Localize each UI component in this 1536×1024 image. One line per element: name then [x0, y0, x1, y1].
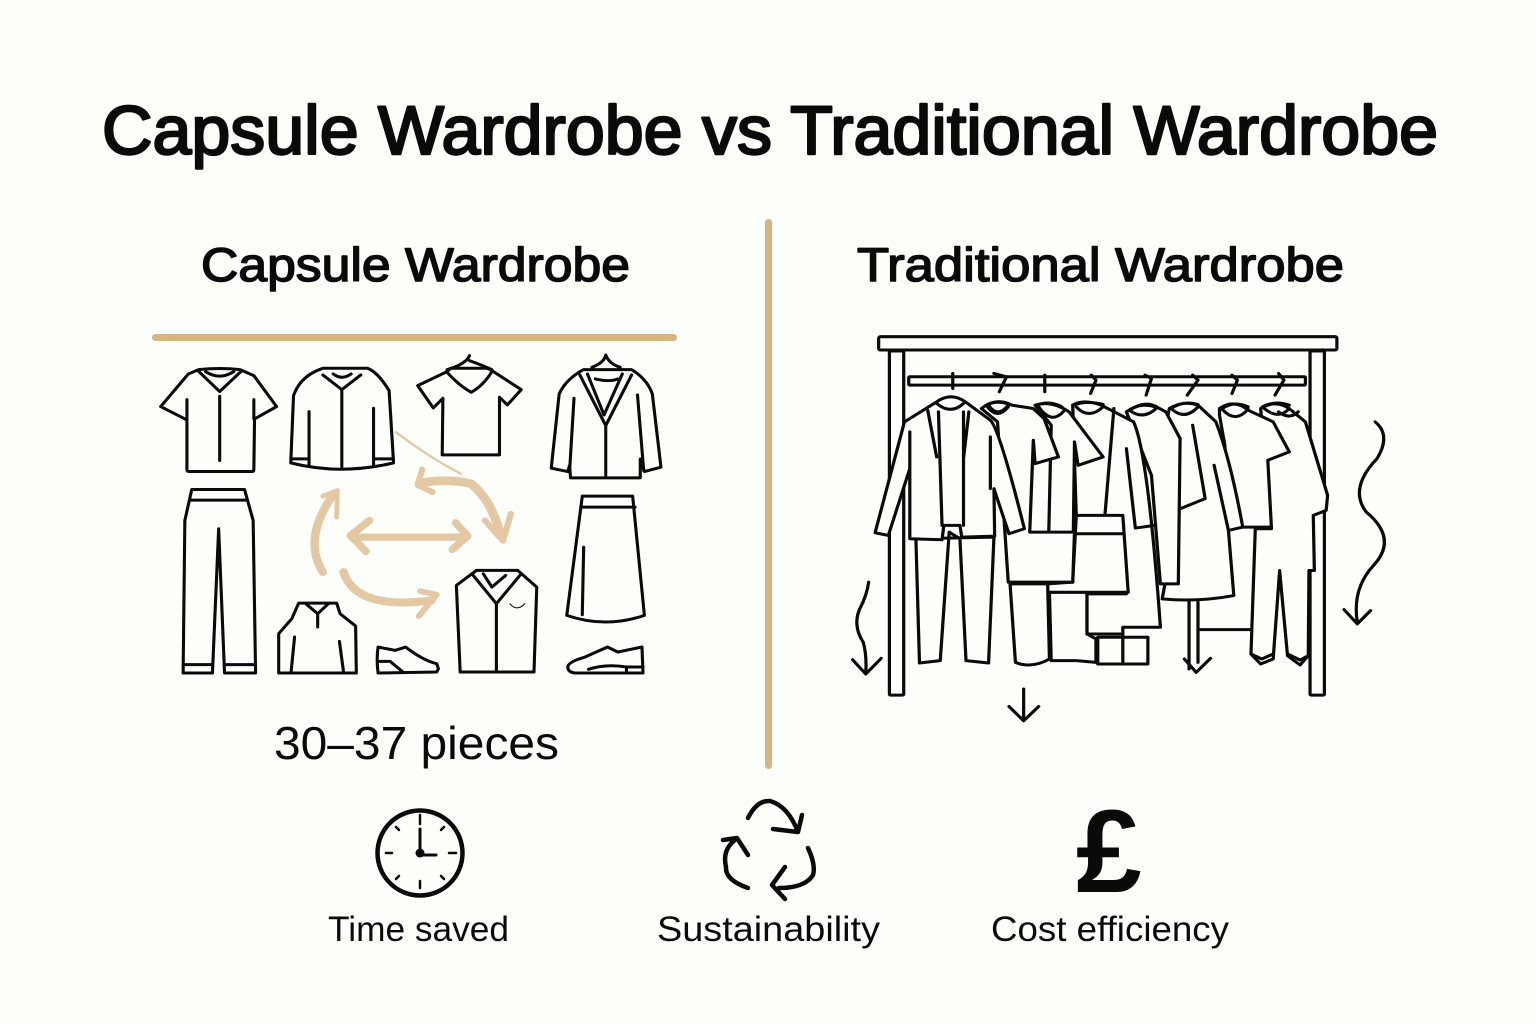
icon: clock: [378, 810, 462, 896]
icon: blazer on hanger: [551, 355, 661, 478]
icon: pound sign: £: [1076, 786, 1142, 918]
garment: skirt: [1048, 515, 1128, 592]
label: sustainability: Sustainability: [657, 910, 881, 949]
benefit: cost efficiency: [991, 786, 1230, 949]
icon: trousers: [183, 490, 256, 673]
icon: sweater: [291, 368, 394, 469]
shelf line: [152, 334, 677, 341]
icon: left shoe: [377, 647, 438, 673]
hangers on rail: [953, 373, 1284, 395]
heading: traditional wardrobe: Traditional Wardrobe: [857, 238, 1344, 291]
garment: trousers, centre-left: [1010, 584, 1049, 665]
hanger collars along the rail: [987, 402, 1289, 417]
arrow: straight bottom: [1009, 689, 1039, 721]
benefit: sustainability: [657, 801, 881, 949]
garment: boxes and hems at bottom: [1049, 592, 1148, 664]
label: time saved: Time saved: [328, 910, 509, 949]
garment: jacket, far left: [875, 397, 1024, 540]
panel: capsule wardrobe: [152, 238, 677, 769]
garment: t-shirt dress, front: [981, 402, 1074, 582]
garment: t-shirt, right: [1219, 404, 1289, 527]
panel: traditional wardrobe: [853, 238, 1384, 721]
icon: t-shirt on hanger: [418, 356, 521, 455]
garments crowded on rack: [875, 397, 1328, 665]
icon: folded jacket: [456, 570, 537, 672]
garment: shirt dress: [1126, 405, 1180, 584]
divider: vertical centre line: [765, 219, 772, 769]
icon: right shoe: [568, 647, 643, 673]
garment: a-line dress: [1155, 403, 1243, 600]
benefit: time saved: [328, 810, 509, 949]
garment: t-shirt dress, back: [1035, 404, 1103, 582]
garment: long coat, centre: [1073, 402, 1160, 634]
label: cost efficiency: Cost efficiency: [991, 910, 1230, 949]
heading: capsule wardrobe: Capsule Wardrobe: [201, 238, 630, 291]
caption: piece count: 30–37 pieces: [274, 717, 559, 769]
overfull clothing rack: [853, 337, 1384, 721]
icon: skirt: [567, 496, 644, 622]
rack frame: [879, 337, 1337, 695]
title: Capsule Wardrobe vs Traditional Wardrobe: [102, 92, 1438, 169]
garment: trousers under jacket: [916, 532, 994, 663]
icon: recycle arrows: [723, 801, 814, 899]
garment: long coat and trousers, far right: [1251, 404, 1328, 665]
arrows: tan mix-and-match cycle: [315, 432, 511, 616]
arrow: under dress: [1184, 602, 1251, 672]
arrow: long wavy right: [1344, 422, 1384, 624]
icon: short-sleeve shirt: [161, 368, 277, 472]
arrow: wavy left: [853, 582, 881, 674]
capsule clothing grid: [161, 355, 661, 673]
icon: small pullover: [279, 603, 356, 673]
